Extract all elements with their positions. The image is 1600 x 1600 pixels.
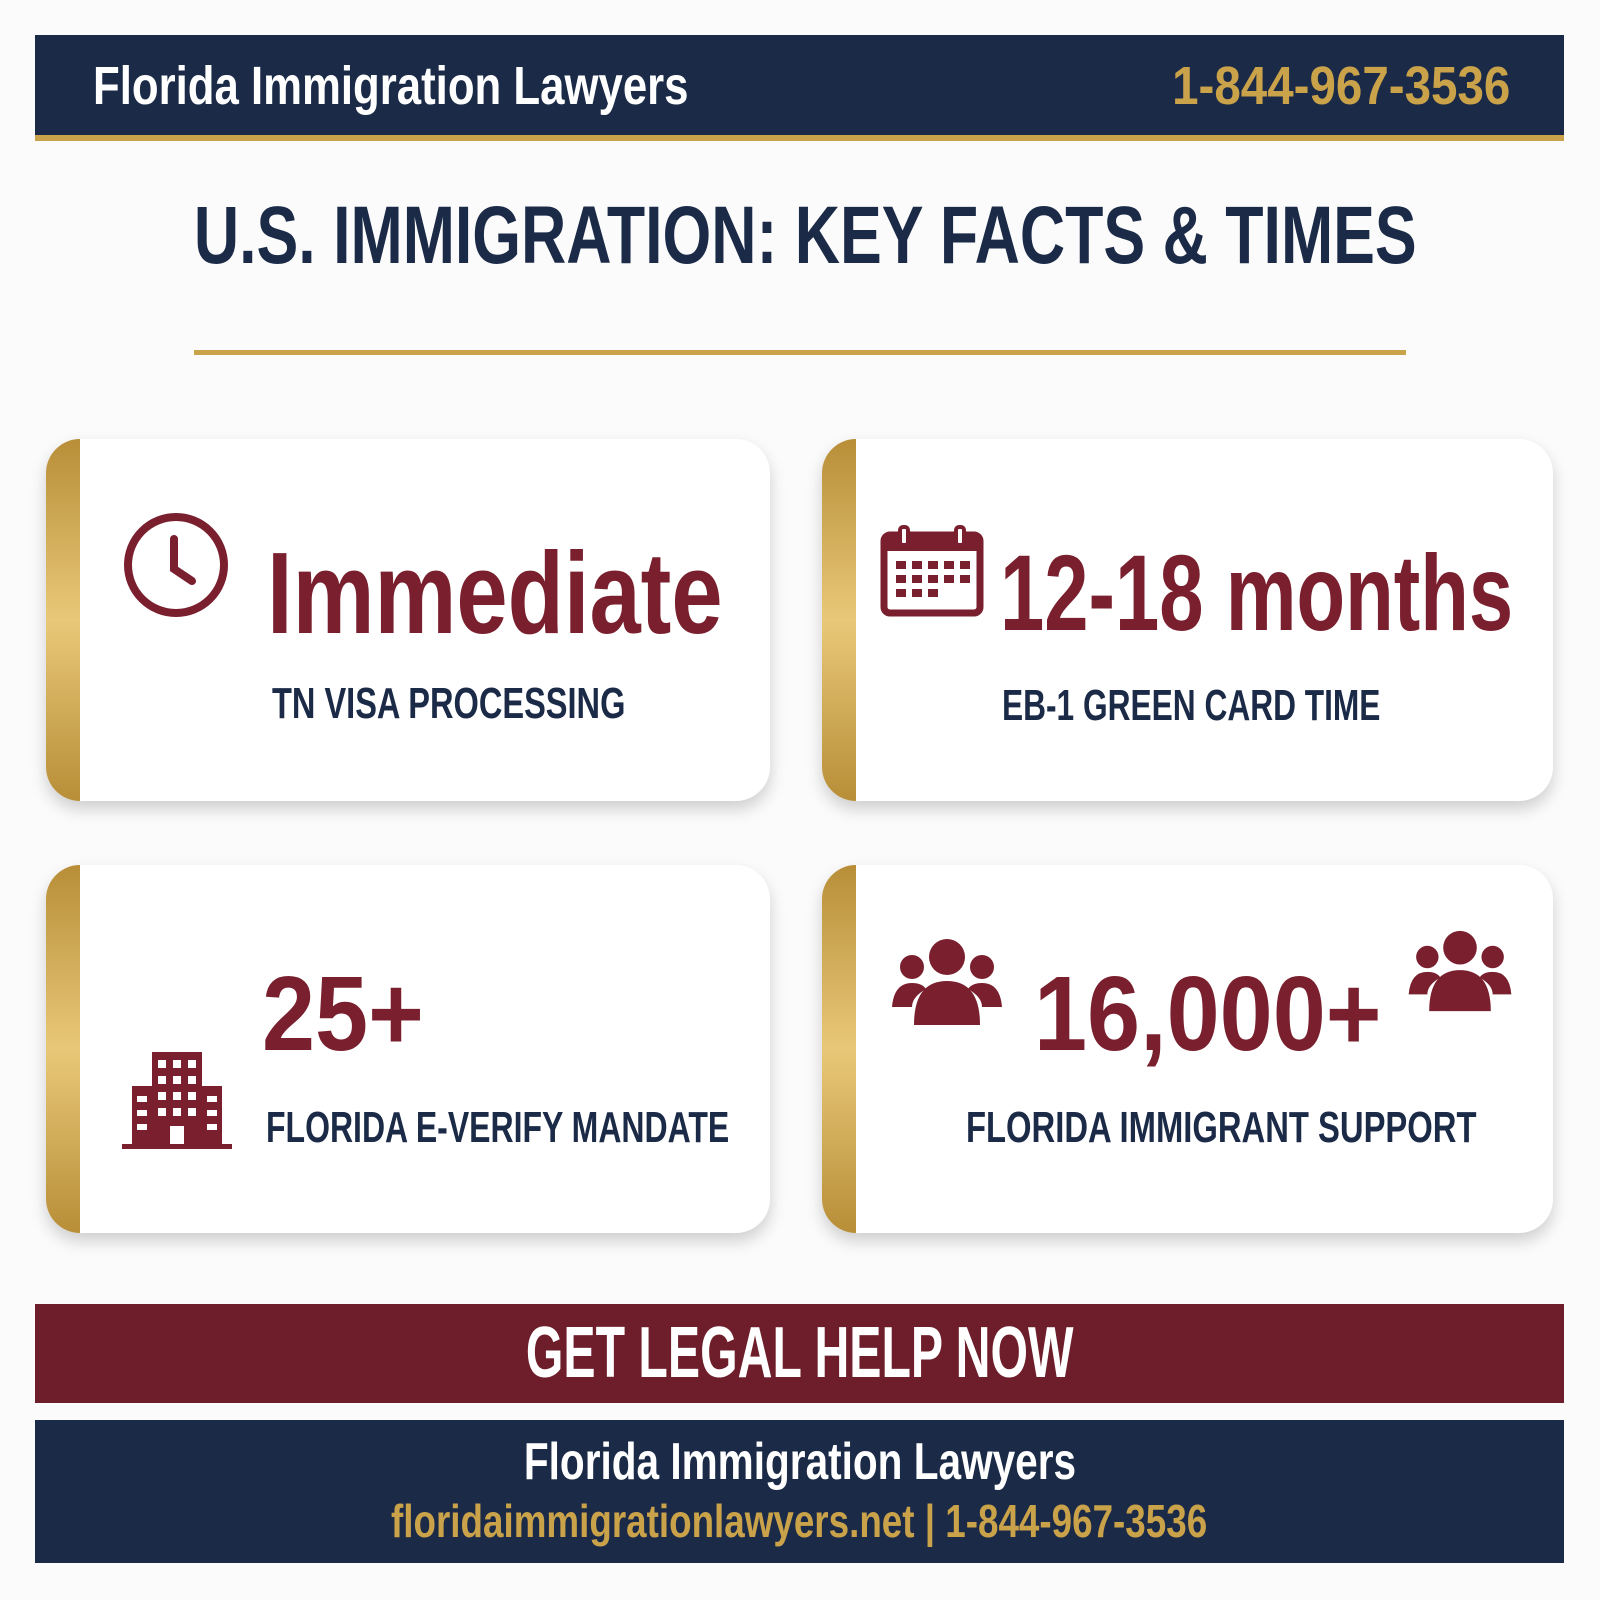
CTA bar: GET LEGAL HELP NOW [526,1313,1073,1393]
label: FLORIDA IMMIGRANT SUPPORT [966,1103,1476,1152]
label: FLORIDA E-VERIFY MANDATE [266,1103,729,1152]
panel: E-Verify [46,865,770,1233]
label: TN VISA PROCESSING [272,679,625,728]
title: U.S. IMMIGRATION: KEY FACTS & TIMES [194,190,1416,281]
value: 16,000+ [1034,955,1382,1073]
header bar [35,35,1564,141]
header firm name: Florida Immigration Lawyers [93,56,688,116]
footer contact: floridaimmigrationlawyers.net | 1-844-967-3536 [391,1495,1208,1547]
value: Immediate [267,528,723,658]
icon: clock [124,513,228,617]
header phone: 1-844-967-3536 [1172,56,1510,116]
icon: people left [892,939,1002,1025]
icon: building [122,1052,232,1149]
gold rule [194,350,1406,355]
footer firm name: Florida Immigration Lawyers [523,1433,1076,1491]
icon: calendar [880,525,984,616]
CTA bar [35,1304,1564,1403]
panel: immigrant support [822,865,1553,1233]
panel: TN visa [46,439,770,801]
icon: people right [1408,930,1512,1012]
value: 12-18 months [1000,532,1513,653]
label: EB-1 GREEN CARD TIME [1002,681,1380,730]
panel: EB-1 [822,439,1553,801]
value: 25+ [262,955,424,1073]
footer [35,1420,1564,1563]
